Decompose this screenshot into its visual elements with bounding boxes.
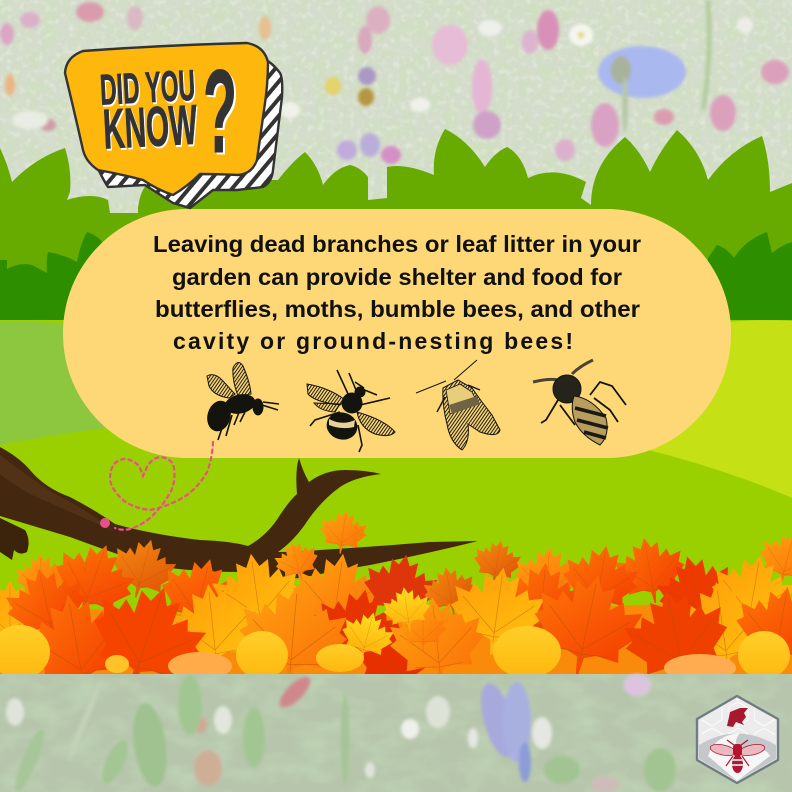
bubble question mark [203, 46, 239, 180]
fact text: Leaving dead branches or leaf litter in your [153, 231, 641, 257]
logo badge [697, 696, 778, 783]
did you know speech bubble: ? [205, 48, 239, 180]
fallen leaf pile [0, 507, 792, 705]
fact text: garden can provide shelter and food for [172, 264, 622, 290]
speech panel [63, 209, 731, 458]
fallen branch [0, 447, 478, 578]
bottom meadow band [0, 672, 792, 792]
bubble heading: DID YOU [99, 62, 196, 115]
fact text [153, 231, 641, 354]
fact text: cavity or ground-nesting bees! [173, 328, 573, 354]
bubble face [65, 43, 268, 195]
bubble heading: KNOW [102, 93, 199, 160]
hills [0, 320, 792, 674]
did you know speech bubble [65, 43, 282, 208]
meadow background [0, 0, 792, 240]
bubble heading: KNOW [103, 95, 200, 162]
front bush shadow layer [0, 232, 792, 330]
did you know speech bubble: ? [203, 46, 237, 178]
logo cougar head [727, 708, 748, 727]
trail: dashed heart flight path [100, 442, 213, 530]
fact text: butterflies, moths, bumble bees, and other [155, 296, 640, 322]
icon: honey bee [533, 360, 626, 445]
icon: moth [416, 360, 500, 450]
icon: bumble bee top view [307, 370, 395, 452]
bubble striped shadow [80, 58, 282, 208]
bubble heading: DID YOU [100, 64, 197, 116]
icon: flying bumble bee [204, 362, 279, 440]
bubble heading [99, 62, 200, 162]
logo bee [709, 740, 766, 773]
foreground bushes [0, 129, 792, 330]
